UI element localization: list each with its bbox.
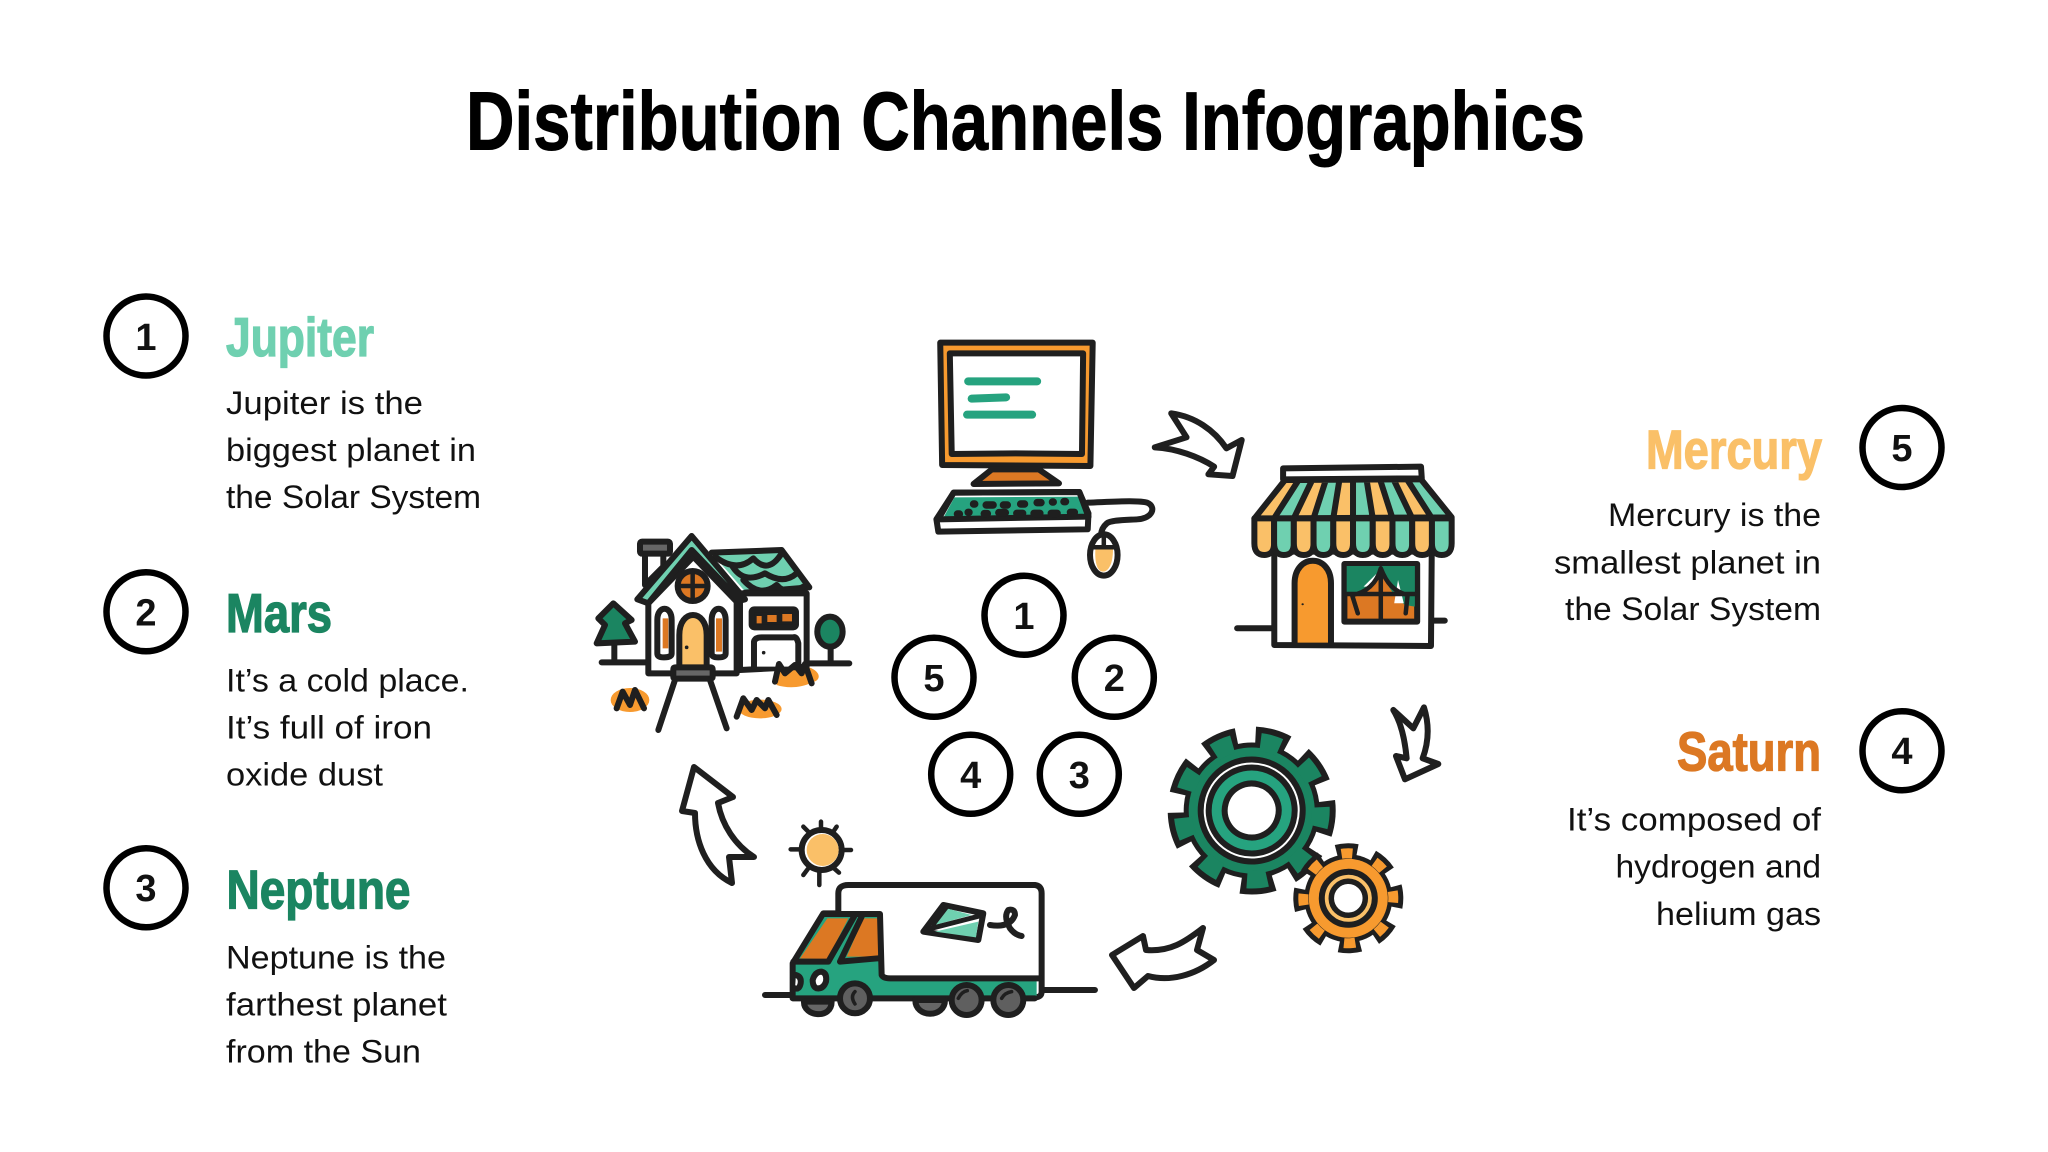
description: Saturn: [1567, 802, 1821, 932]
heading: Mercury: Mercury: [1646, 418, 1822, 480]
number badge 5: 5: [1891, 428, 1913, 470]
heading: Neptune: Neptune: [226, 858, 410, 920]
description: Jupiter: the Solar System: [226, 479, 481, 515]
number badge 3: [106, 848, 186, 927]
description: Mars: oxide dust: [226, 756, 383, 792]
number badge 4: [1862, 711, 1942, 790]
number badge 4: 4: [1891, 731, 1913, 773]
item 2: Mars: [106, 572, 469, 792]
number badge 1: 1: [135, 317, 157, 359]
item 1: Jupiter: [106, 296, 481, 515]
icon: delivery truck: [765, 885, 1095, 1016]
centre numbered circles: 2: [1104, 658, 1125, 700]
icon: store: [1237, 467, 1452, 646]
title: Distribution Channels Infographics: [466, 74, 1585, 167]
centre numbered circles: 3: [1069, 755, 1090, 797]
arrow: computer to store: [1155, 413, 1242, 476]
description: Neptune: [226, 939, 447, 1070]
icon: computer: [936, 343, 1152, 576]
number badge 5: [1862, 408, 1942, 487]
centre numbered circles: 1: [1013, 596, 1035, 638]
icon: sun: [791, 822, 851, 885]
arrow: gears to truck: [1112, 928, 1214, 988]
item 5: Mercury: [1554, 408, 1942, 627]
description: Mars: It’s a cold place.: [226, 662, 469, 698]
heading: Jupiter: Jupiter: [226, 306, 374, 368]
description: Neptune: Neptune is the: [226, 939, 446, 975]
description: Mars: It’s full of iron: [226, 710, 432, 746]
description: Neptune: farthest planet: [226, 987, 447, 1023]
description: Mercury: the Solar System: [1565, 591, 1821, 627]
centre numbered circles: 4: [960, 755, 981, 797]
icon: house: [597, 536, 849, 730]
number badge 2: [106, 572, 186, 651]
description: Mercury: Mercury is the: [1608, 497, 1821, 533]
heading: Saturn: Saturn: [1677, 721, 1821, 783]
description: Jupiter: biggest planet in: [226, 432, 476, 468]
description: Mercury: [1554, 497, 1821, 627]
description: Neptune: from the Sun: [226, 1034, 421, 1070]
heading: Mars: Mars: [226, 582, 332, 644]
arrow: store to gears: [1393, 707, 1438, 779]
description: Mercury: smallest planet in: [1554, 544, 1821, 580]
item 4: Saturn: [1567, 711, 1942, 932]
description: Saturn: helium gas: [1656, 896, 1821, 932]
description: Jupiter: Jupiter is the: [226, 385, 423, 421]
item 3: Neptune: [106, 848, 447, 1070]
centre numbered circles: [894, 576, 1154, 814]
number badge 2: 2: [135, 592, 157, 634]
number badge 3: 3: [135, 868, 157, 910]
description: Saturn: hydrogen and: [1616, 849, 1821, 885]
icon: gears: [1163, 722, 1397, 947]
description: Saturn: It’s composed of: [1567, 802, 1821, 838]
large green gear: [1163, 722, 1340, 899]
centre numbered circles: 5: [923, 658, 945, 700]
description: Jupiter: [226, 385, 481, 515]
small orange gear: [1300, 850, 1397, 947]
arrow: truck to house: [682, 767, 754, 883]
description: Mars: [226, 662, 469, 792]
number badge 1: [106, 296, 186, 376]
